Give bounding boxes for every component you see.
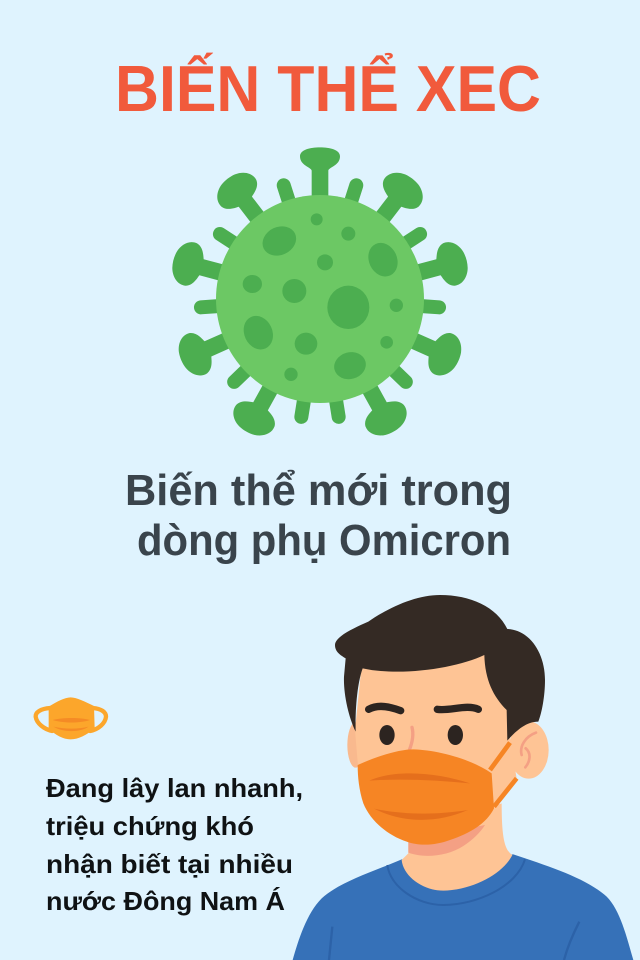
text block: spread description: Đang lây lan nhanh, [46,773,303,803]
subtitle: dòng phụ Omicron [137,516,511,565]
text block: spread description [46,773,303,916]
eyebrows [369,706,478,711]
hair [335,595,545,741]
face [355,653,517,810]
mask straps [490,743,517,807]
eyes [379,725,463,745]
shirt [293,854,633,960]
neck [402,803,512,891]
face mask [358,749,494,845]
chin shadow [408,825,485,856]
nose [409,727,413,750]
subtitle [125,466,512,565]
ears [347,721,549,779]
text block: spread description: nhận biết tại nhiều [46,849,293,879]
title: BIẾN THỂ XEC [115,52,541,125]
text block: spread description: nước Đông Nam Á [46,886,285,916]
text block: spread description: triệu chứng khó [46,811,254,841]
icon: green virus [168,147,472,442]
icon: small orange mask [36,697,106,739]
subtitle: Biến thể mới trong [125,466,512,515]
illustration: man wearing mask [293,595,633,960]
